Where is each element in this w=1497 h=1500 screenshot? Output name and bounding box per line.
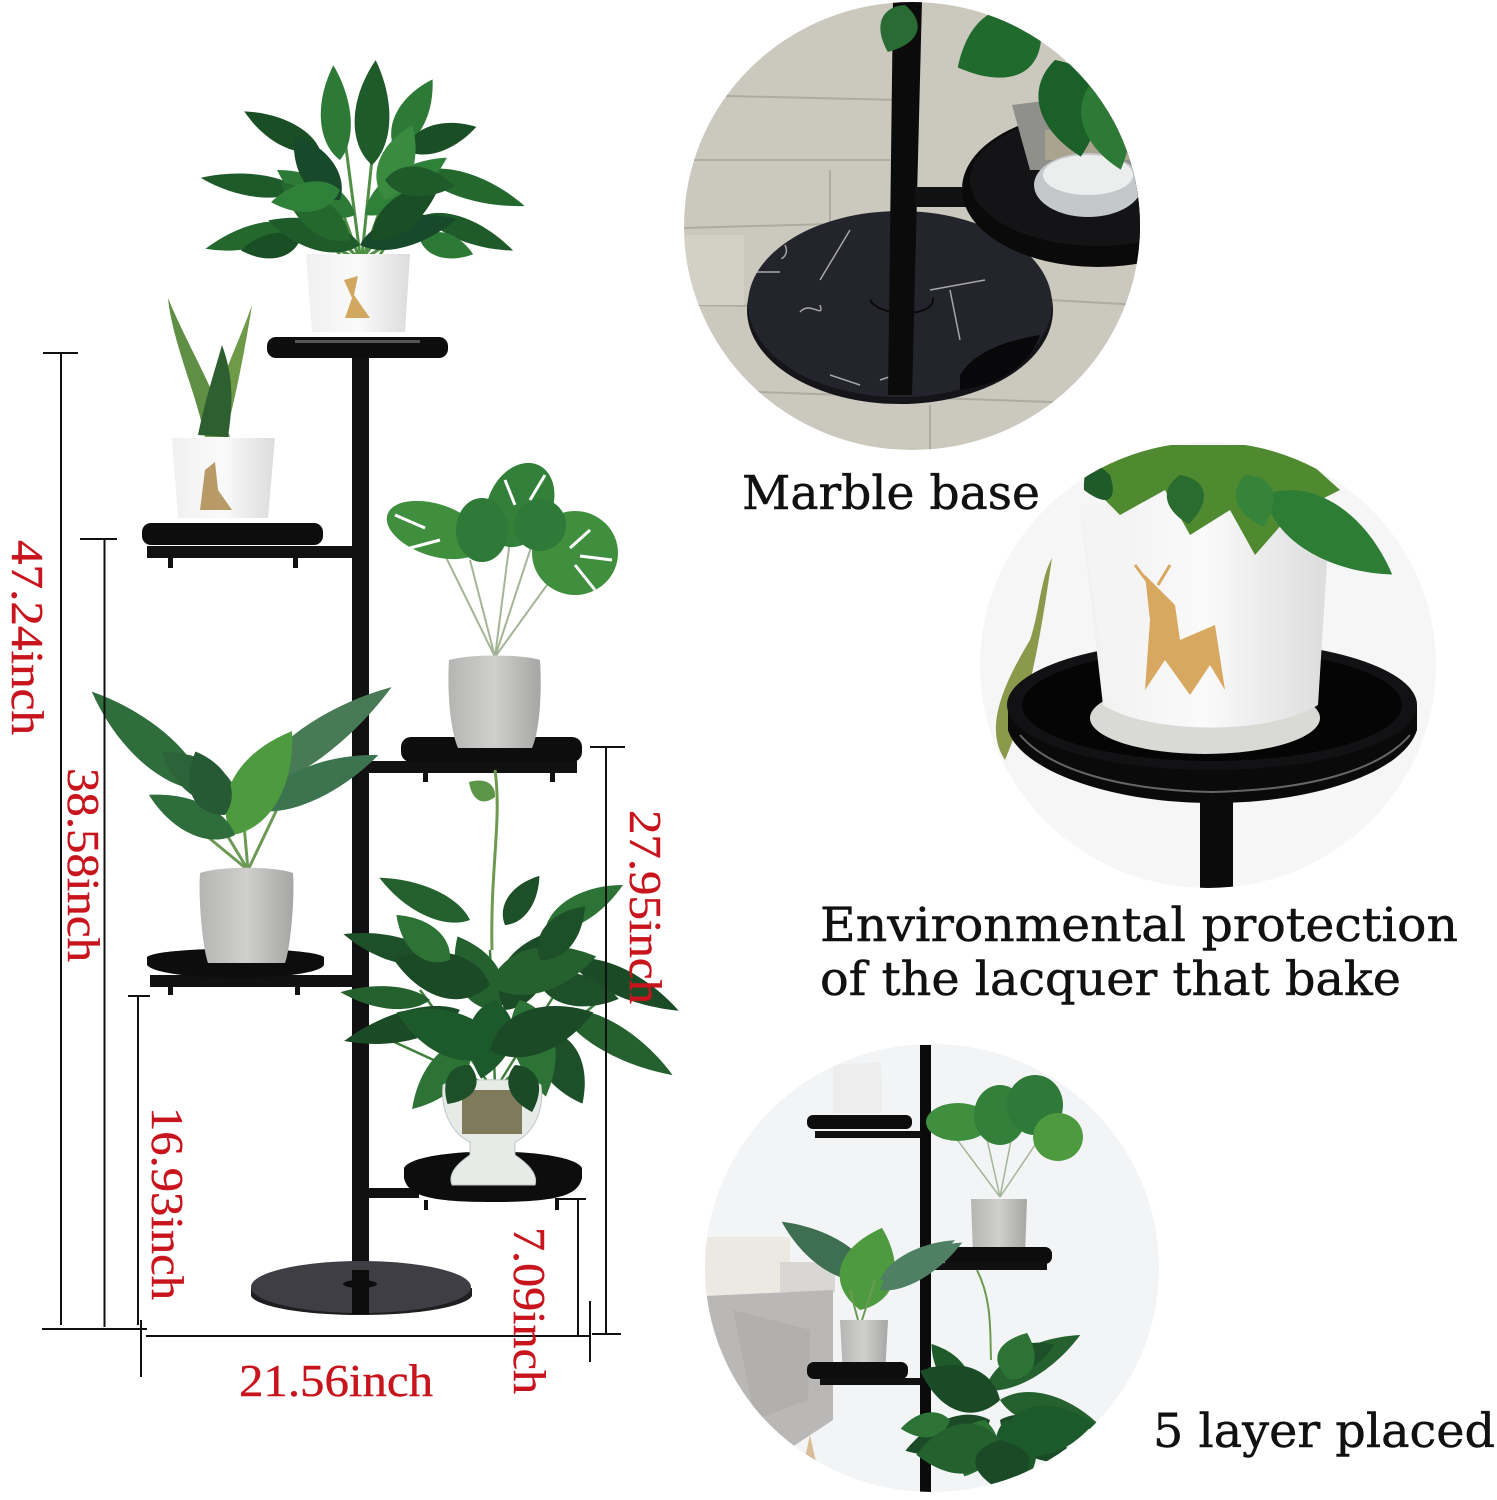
saucer — [1090, 702, 1320, 754]
plant: glass vase lily — [339, 770, 685, 1185]
dimension label: 7.09inch: 7.09inch — [504, 1227, 555, 1394]
marble base — [251, 1261, 472, 1315]
black tray — [1007, 640, 1417, 803]
lower tray — [807, 1362, 920, 1385]
shelf 2 — [142, 523, 353, 568]
plant: rubber leaf plant — [78, 672, 401, 963]
leaves — [1084, 445, 1392, 574]
shelf 5 — [369, 1152, 582, 1210]
dimension label: 16.93inch: 16.93inch — [142, 1107, 193, 1300]
caption: Marble base: Marble base — [742, 466, 1040, 521]
dimension label: 38.58inch: 38.58inch — [58, 768, 109, 962]
dimension lines — [42, 353, 625, 1377]
pole — [1200, 802, 1233, 888]
photo circle: 5 layer placed — [705, 1040, 1161, 1496]
thin leaf — [996, 558, 1052, 760]
rubber plant — [782, 1222, 962, 1320]
tray — [962, 111, 1140, 267]
stand pole — [352, 358, 369, 1303]
white pot — [1096, 527, 1327, 728]
cement pot — [971, 1199, 1027, 1247]
shelf 3 — [369, 737, 582, 782]
shelf 4 — [147, 949, 355, 995]
sofa — [705, 1237, 835, 1480]
pole — [920, 1045, 931, 1495]
monstera — [926, 1075, 1083, 1197]
glass vase — [1012, 90, 1142, 217]
plant: snake plant — [168, 298, 275, 518]
leaves — [880, 5, 1127, 170]
middle tray — [930, 1247, 1052, 1270]
top tray — [807, 1115, 921, 1138]
caption: Environmental protection of the lacquer that bake: Environmental protection — [820, 898, 1458, 953]
marble disc — [747, 211, 1053, 404]
photo circle: lacquer tray — [980, 437, 1436, 893]
caption: Environmental protection of the lacquer that bake: of the lacquer that bake — [820, 952, 1401, 1007]
white pot — [306, 254, 410, 332]
photo circle: marble base — [684, 2, 1140, 450]
plant: peace lily on top shelf — [199, 59, 529, 332]
shelf 1 top — [267, 337, 448, 358]
dimension label: 21.56inch: 21.56inch — [239, 1355, 433, 1406]
cement pot — [448, 656, 541, 748]
pole and arm — [870, 0, 970, 395]
plant: monstera — [379, 452, 618, 748]
white pot — [833, 1062, 882, 1113]
caption: Environmental protection of the lacquer that bake — [820, 898, 1458, 1007]
lily — [899, 1270, 1106, 1490]
dimension label: 47.24inch: 47.24inch — [2, 540, 53, 735]
caption: 5 layer placed: 5 layer placed — [1153, 1404, 1495, 1459]
gold deer — [1145, 575, 1225, 695]
cement pot — [200, 868, 293, 963]
white pot — [172, 438, 275, 518]
dimension label: 27.95inch: 27.95inch — [620, 810, 671, 1004]
cement pot — [840, 1320, 888, 1362]
glass vase — [436, 1058, 547, 1185]
plant stand — [142, 337, 582, 1315]
